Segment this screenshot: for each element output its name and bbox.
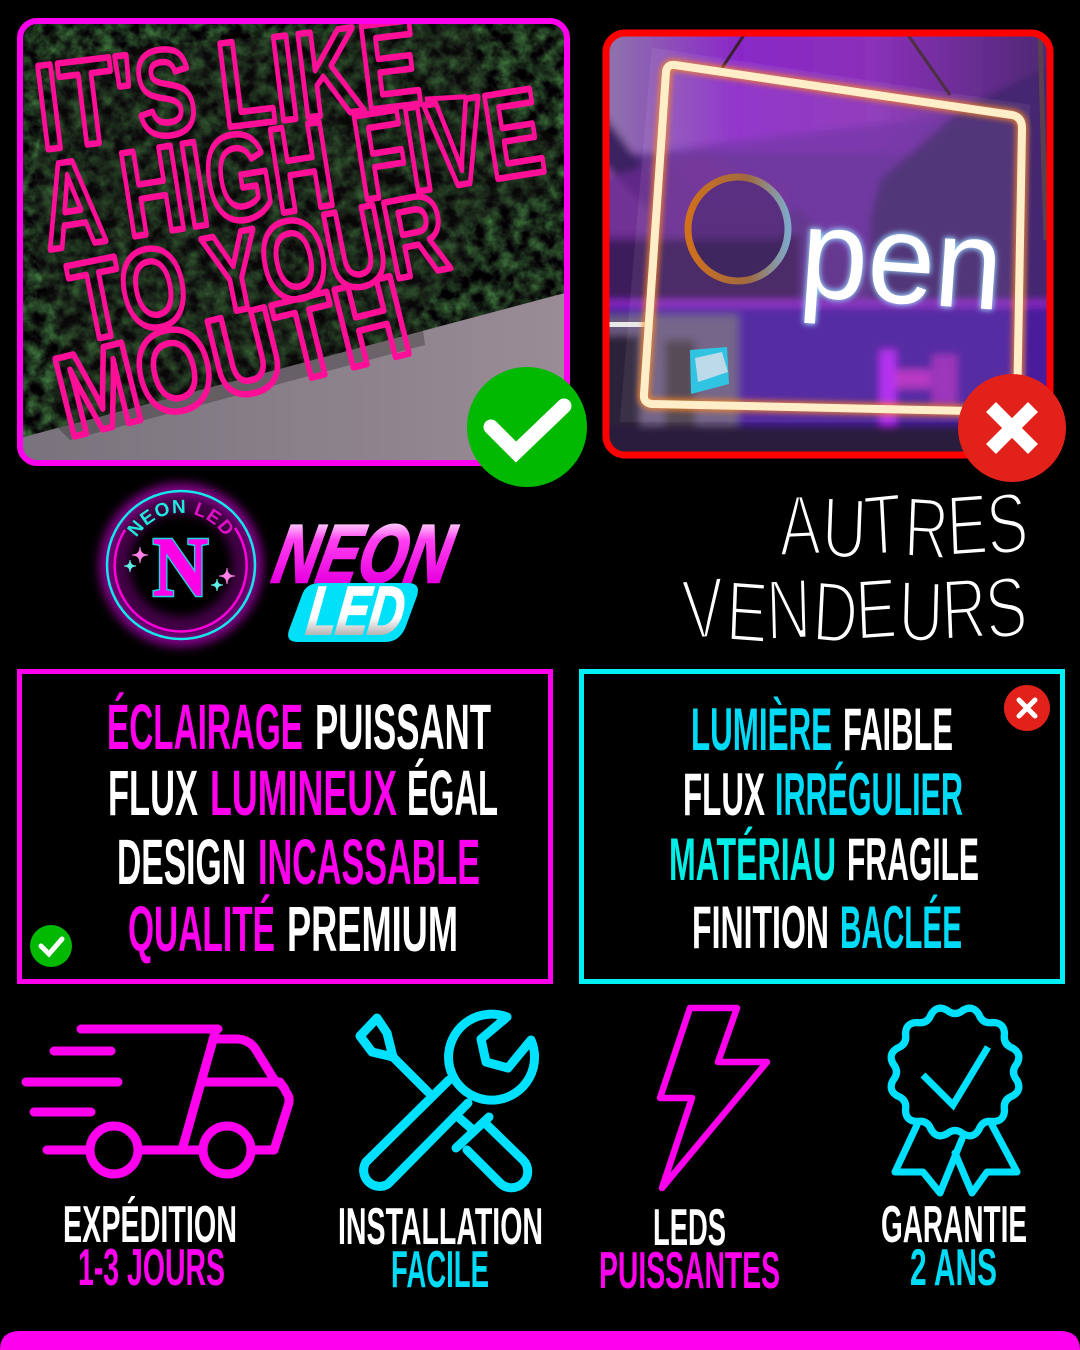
icon: small green check xyxy=(30,925,72,967)
line: materiau fragile: MATÉRIAU xyxy=(669,826,836,893)
logo letter N: N xyxy=(153,521,208,614)
label: installation xyxy=(338,1198,543,1299)
line: flux lumineux egal: ÉGAL xyxy=(407,757,498,829)
ring of the letter O xyxy=(688,177,788,281)
icon: red cross badge xyxy=(958,374,1066,482)
label: leds xyxy=(599,1199,780,1300)
logo: wordmark NEON LED xyxy=(266,508,463,649)
label: leds: PUISSANTES xyxy=(599,1242,780,1300)
neon frame xyxy=(644,65,1022,412)
neon text: line 4: MOUTH xyxy=(43,250,422,462)
line: eclairage puissant: ÉCLAIRAGE xyxy=(107,691,303,763)
line: design incassable: INCASSABLE xyxy=(258,826,480,898)
neon word pen: pen xyxy=(796,181,1008,338)
heading: other sellers xyxy=(679,475,1032,662)
neon text: line 1 xyxy=(35,24,466,152)
icon: small red cross xyxy=(1004,685,1050,731)
label: leds: LEDS xyxy=(653,1199,726,1257)
line: flux irregulier xyxy=(683,761,963,828)
neon word pen: pen xyxy=(796,181,1008,338)
logo: neon led badge xyxy=(92,476,270,654)
label: warranty xyxy=(881,1196,1027,1297)
neon text: line 3: TO YOUR xyxy=(60,168,457,366)
line: flux irregulier: FLUX xyxy=(683,761,765,828)
icon: green check badge xyxy=(467,367,587,487)
photo: other seller neon sign xyxy=(596,23,1060,465)
logo letter N: N xyxy=(153,521,208,614)
logo sparkles xyxy=(124,547,235,591)
line: lumiere faible: LUMIÈRE xyxy=(691,696,832,763)
label: warranty: 2 ANS xyxy=(910,1239,997,1297)
label: installation: INSTALLATION xyxy=(338,1198,543,1256)
line: qualite premium: PREMIUM xyxy=(287,893,458,965)
line: eclairage puissant: PUISSANT xyxy=(315,691,491,763)
label: shipping: 1-3 JOURS xyxy=(78,1239,225,1297)
logo ring text: NEON LED xyxy=(126,500,232,537)
neon text: line 2: A HIGH FIVE xyxy=(31,62,552,276)
line: qualite premium: QUALITÉ xyxy=(128,893,275,965)
line: finition baclee: BACLÉE xyxy=(840,894,962,961)
wordmark LED: LED xyxy=(303,573,410,649)
line: lumiere faible: FAIBLE xyxy=(843,696,953,763)
label: shipping: EXPÉDITION xyxy=(63,1196,237,1254)
footer bar xyxy=(0,1331,1080,1350)
panel: neon led advantages xyxy=(20,672,550,982)
icon: warranty medal xyxy=(883,1000,1027,1193)
label: shipping xyxy=(63,1196,237,1297)
line: flux lumineux egal: FLUX xyxy=(108,757,198,829)
line: flux lumineux egal: LUMINEUX xyxy=(210,757,397,829)
icon: fast delivery truck xyxy=(26,1029,289,1174)
label: installation: FACILE xyxy=(391,1241,489,1299)
heading: other sellers: AUTRES xyxy=(777,475,1032,577)
line: flux lumineux egal xyxy=(108,757,498,829)
line: finition baclee: FINITION xyxy=(692,894,829,961)
wordmark pill xyxy=(288,583,418,642)
line: design incassable xyxy=(117,826,480,898)
neon word pen xyxy=(799,224,1000,329)
icon: tools wrench and screwdriver xyxy=(360,1014,535,1188)
heading: other sellers: VENDEURS xyxy=(679,559,1031,662)
panel: other sellers drawbacks xyxy=(582,672,1062,982)
photo: good neon sign xyxy=(20,0,570,466)
icon: lightning bolt xyxy=(660,1008,767,1188)
line: design incassable: DESIGN xyxy=(117,826,246,898)
wordmark NEON: NEON xyxy=(266,508,463,600)
